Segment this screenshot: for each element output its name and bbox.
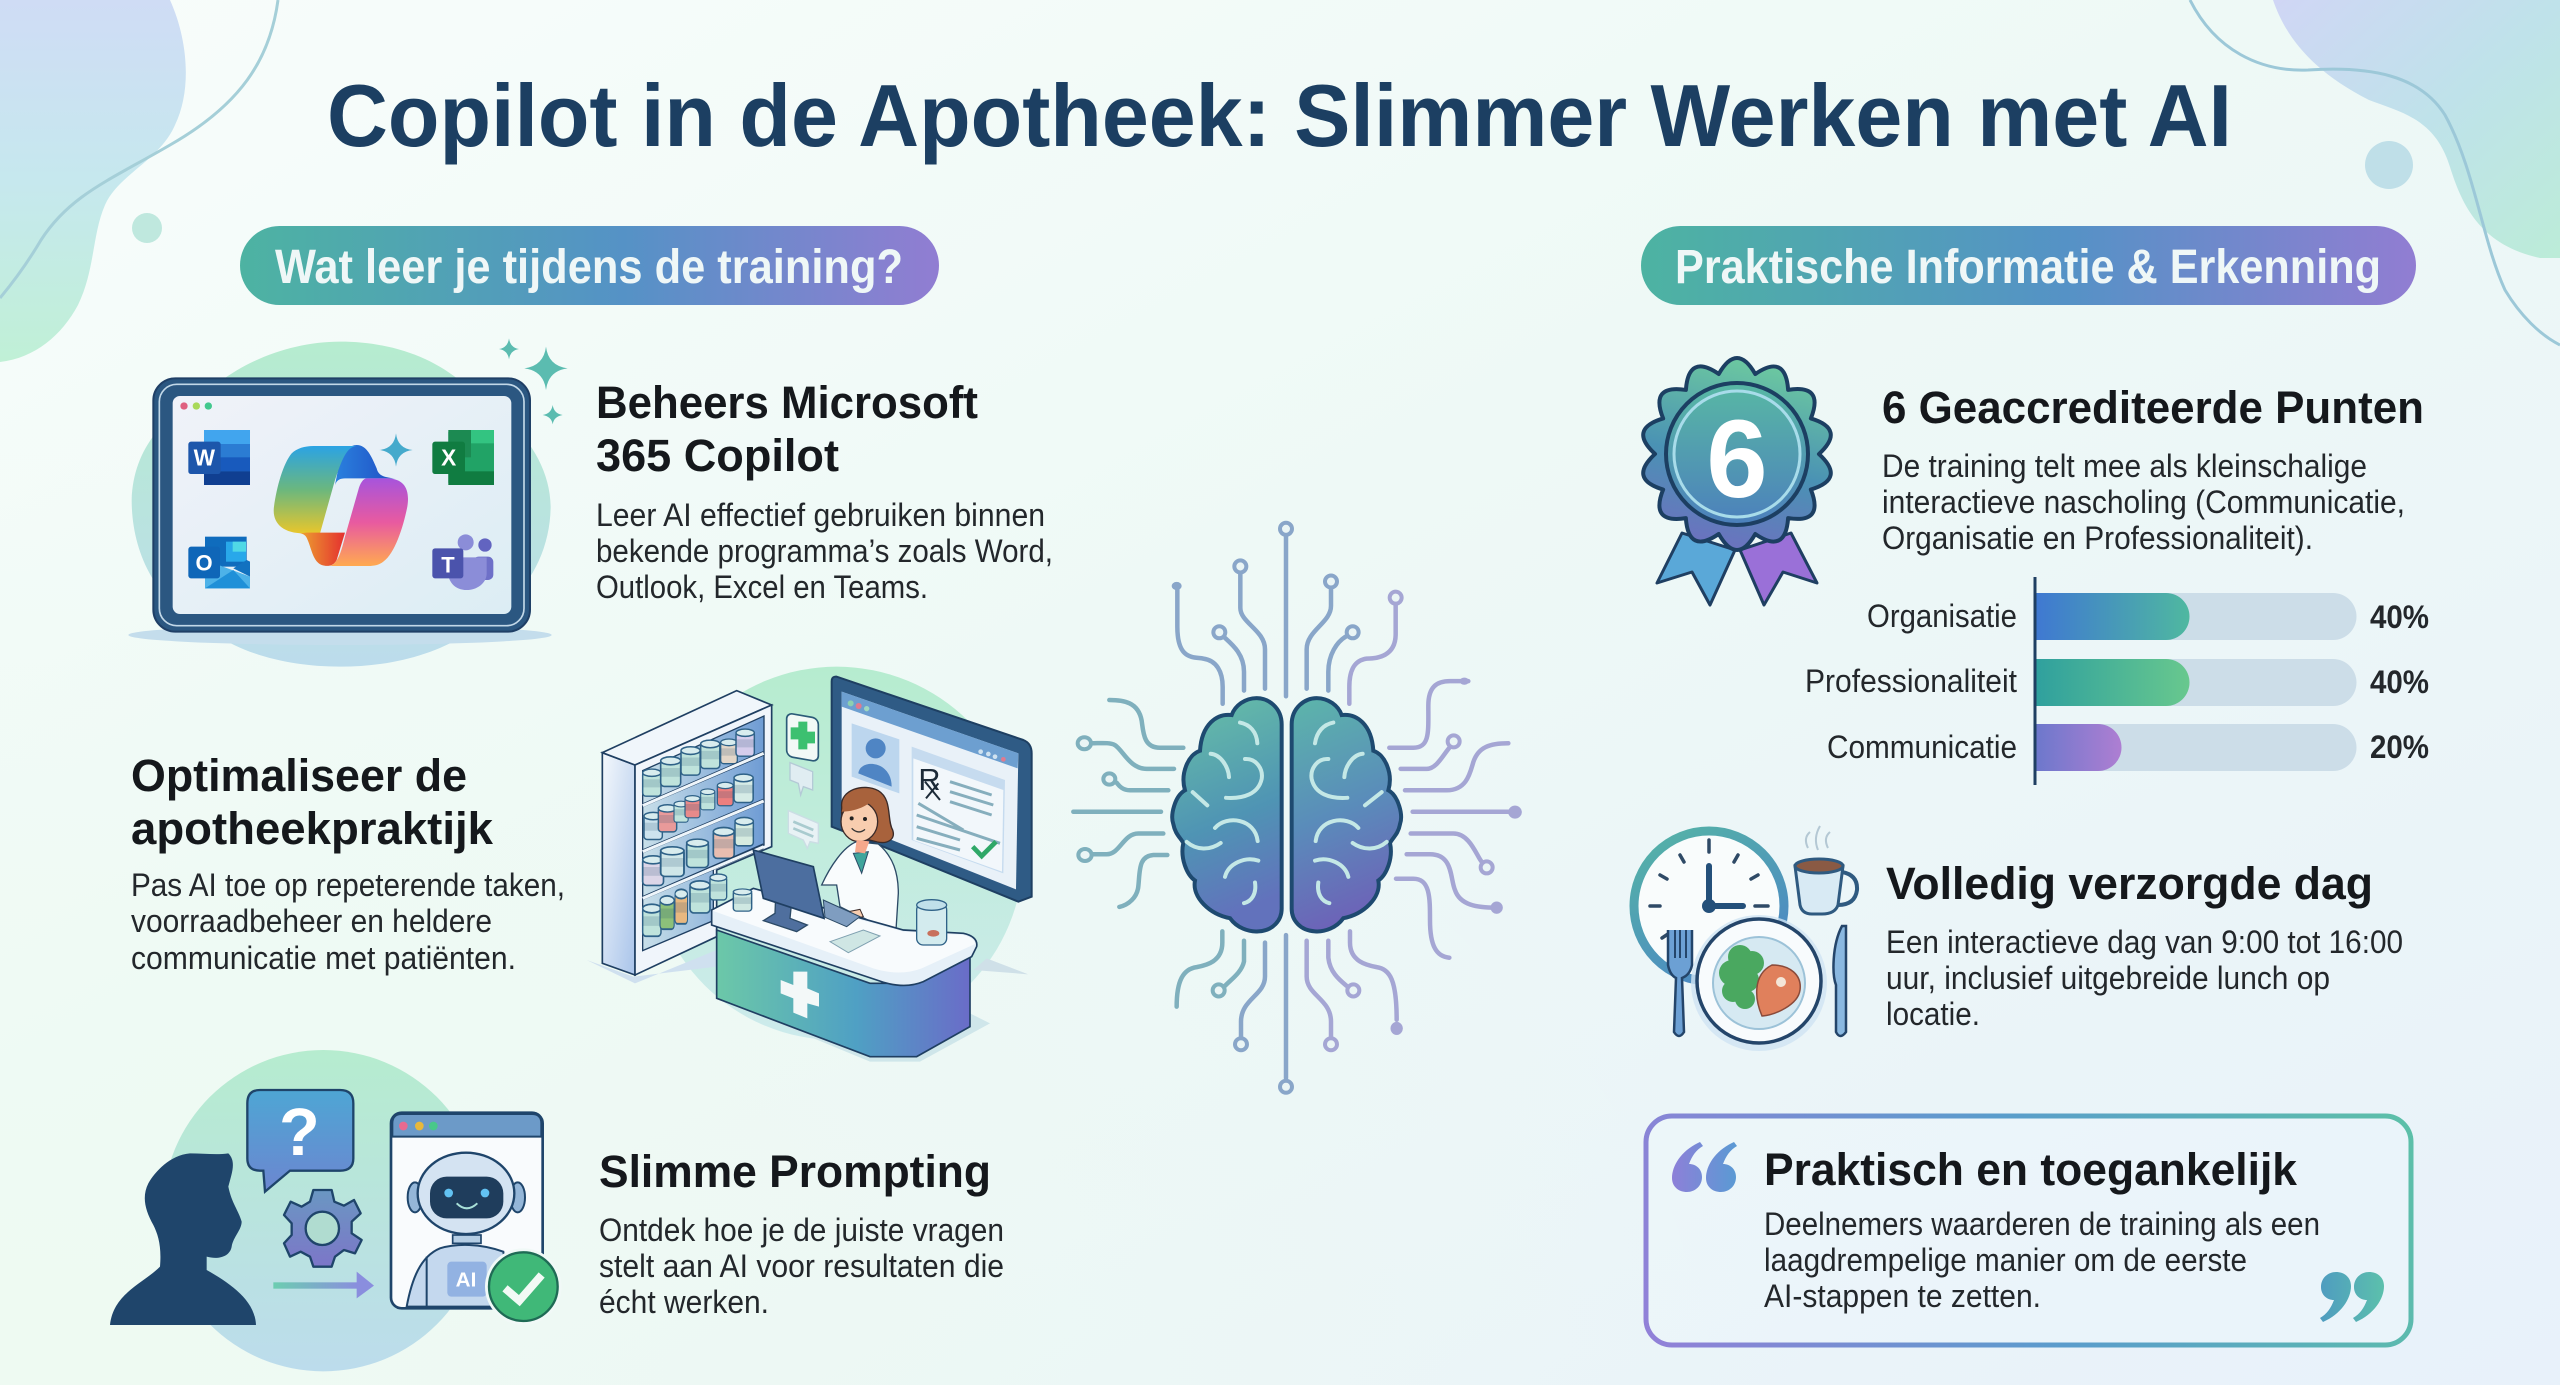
icon: Excel <box>432 430 494 485</box>
text block: Slimme Prompting: écht werken. <box>599 1284 769 1320</box>
icon: closing quote <box>2320 1272 2384 1322</box>
bar: Organisatie 40% <box>1867 593 2429 640</box>
decorative blob: top right <box>2190 0 2560 345</box>
plate <box>1691 915 1827 1051</box>
icon: Excel: X <box>441 445 456 471</box>
icon: question bubble <box>247 1090 353 1192</box>
floating health card <box>787 713 818 848</box>
text block: Optimaliseer de apotheekpraktijk: communicatie met patiënten. <box>131 940 516 976</box>
text block: Optimaliseer de apotheekpraktijk <box>131 750 565 976</box>
coffee cup <box>1795 826 1857 914</box>
icon: sparkles <box>499 338 568 424</box>
knife <box>1834 926 1846 1036</box>
section heading: right pill: Praktische Informatie & Erkenning <box>1675 241 2381 294</box>
section heading: right pill <box>1641 226 2416 305</box>
icon: accreditation rosette: 6 <box>1706 398 1768 521</box>
icon: Teams <box>432 534 493 590</box>
text block: Beheers Microsoft 365 Copilot: Beheers Microsoft <box>596 377 978 428</box>
icon: question bubble: ? <box>279 1096 320 1170</box>
icon: Word <box>188 430 250 485</box>
bar: Professionaliteit 40%: 40% <box>2370 664 2429 700</box>
pharmacist <box>822 787 898 930</box>
icon: Teams: T <box>441 552 455 577</box>
callout: Praktisch en toegankelijk: laagdrempelige manier om de eerste <box>1764 1242 2247 1278</box>
text block: Beheers Microsoft 365 Copilot <box>596 377 1053 605</box>
text block: Slimme Prompting: stelt aan AI voor resultaten die <box>599 1248 1004 1284</box>
text block: 6 Geaccrediteerde Punten: interactieve nascholing (Communicatie, <box>1882 484 2405 520</box>
text block: 6 Geaccrediteerde Punten: 6 Geaccrediteerde Punten <box>1882 382 2424 433</box>
text block: Slimme Prompting: Ontdek hoe je de juiste vragen <box>599 1212 1004 1248</box>
icon: gear <box>284 1190 362 1267</box>
text block: Optimaliseer de apotheekpraktijk: voorraadbeheer en heldere <box>131 903 492 939</box>
text block: 6 Geaccrediteerde Punten: Organisatie en Professionaliteit). <box>1882 520 2313 556</box>
text block: Beheers Microsoft 365 Copilot: Leer AI effectief gebruiken binnen <box>596 497 1045 533</box>
text block: Volledig verzorgde dag: Een interactieve dag van 9:00 tot 16:00 <box>1886 924 2403 960</box>
section heading: left pill: Wat leer je tijdens de training? <box>275 241 903 294</box>
text block: Volledig verzorgde dag: uur, inclusief uitgebreide lunch op <box>1886 960 2330 996</box>
illustration: pharmacy counter with pharmacist <box>587 667 1032 1062</box>
text block: Optimaliseer de apotheekpraktijk: Pas AI toe op repeterende taken, <box>131 867 565 903</box>
text block: 6 Geaccrediteerde Punten <box>1882 382 2424 556</box>
monitor with patient record <box>832 677 1032 902</box>
bar: Organisatie 40%: 40% <box>2370 599 2429 635</box>
text block: Beheers Microsoft 365 Copilot: bekende programma’s zoals Word, <box>596 533 1053 569</box>
text block: Beheers Microsoft 365 Copilot: Outlook, Excel en Teams. <box>596 569 928 605</box>
text block: Optimaliseer de apotheekpraktijk: apotheekpraktijk <box>131 803 494 854</box>
icon: Word: W <box>194 445 216 471</box>
pharmacy counter <box>712 850 977 1057</box>
icon: clock, coffee and lunch plate <box>1634 826 1857 1051</box>
illustration: prompting person and AI robot <box>110 1050 562 1371</box>
icon: accreditation rosette <box>1623 341 1851 605</box>
text block: Slimme Prompting: Slimme Prompting <box>599 1146 991 1197</box>
icon: person silhouette <box>110 1153 256 1325</box>
bar: Communicatie 20%: 20% <box>2370 729 2429 765</box>
icon: check badge <box>485 1248 562 1325</box>
icon: Outlook <box>188 537 250 588</box>
bar chart: accreditation distribution <box>1805 577 2429 785</box>
text block: Slimme Prompting <box>599 1146 1004 1320</box>
illustration: brain with circuit traces <box>1073 523 1522 1093</box>
bar: Professionaliteit 40%: Professionaliteit <box>1805 663 2017 699</box>
text block: 6 Geaccrediteerde Punten: De training telt mee als kleinschalige <box>1882 448 2367 484</box>
icon: opening quote <box>1672 1142 1737 1192</box>
icon: Copilot logo <box>274 445 408 566</box>
callout: Praktisch en toegankelijk: AI-stappen te zetten. <box>1764 1278 2041 1314</box>
decorative blob: top left <box>0 0 278 362</box>
illustration: tablet with Microsoft 365 apps <box>128 338 568 667</box>
medicine cabinet <box>602 691 772 975</box>
text block: Volledig verzorgde dag: Volledig verzorgde dag <box>1886 858 2373 909</box>
text block: Volledig verzorgde dag: locatie. <box>1886 996 1980 1032</box>
icon: brain <box>1172 698 1401 931</box>
bar: Organisatie 40%: Organisatie <box>1867 598 2017 634</box>
section heading: left pill <box>240 226 939 305</box>
text block: Volledig verzorgde dag <box>1886 858 2403 1032</box>
arrow <box>273 1272 374 1298</box>
text block: Beheers Microsoft 365 Copilot: 365 Copilot <box>596 430 839 481</box>
text block: Optimaliseer de apotheekpraktijk: Optimaliseer de <box>131 750 467 801</box>
callout: Praktisch en toegankelijk: Deelnemers waarderen de training als een <box>1764 1206 2320 1242</box>
browser window with robot: AI <box>456 1269 476 1292</box>
icon: Outlook: O <box>195 551 213 576</box>
fork <box>1668 930 1692 1036</box>
prescription symbol: R <box>918 763 940 797</box>
bar: Communicatie 20% <box>1827 724 2429 771</box>
bar: Communicatie 20%: Communicatie <box>1827 729 2017 765</box>
bar: Professionaliteit 40% <box>1805 659 2429 706</box>
browser window with robot <box>391 1113 543 1308</box>
callout: Praktisch en toegankelijk: Praktisch en toegankelijk <box>1764 1144 2298 1195</box>
clock <box>1634 831 1784 981</box>
callout: Praktisch en toegankelijk <box>1646 1116 2411 1345</box>
circuit traces <box>1073 523 1522 1093</box>
title: Copilot in de Apotheek: Slimmer Werken met AI <box>327 66 2232 165</box>
